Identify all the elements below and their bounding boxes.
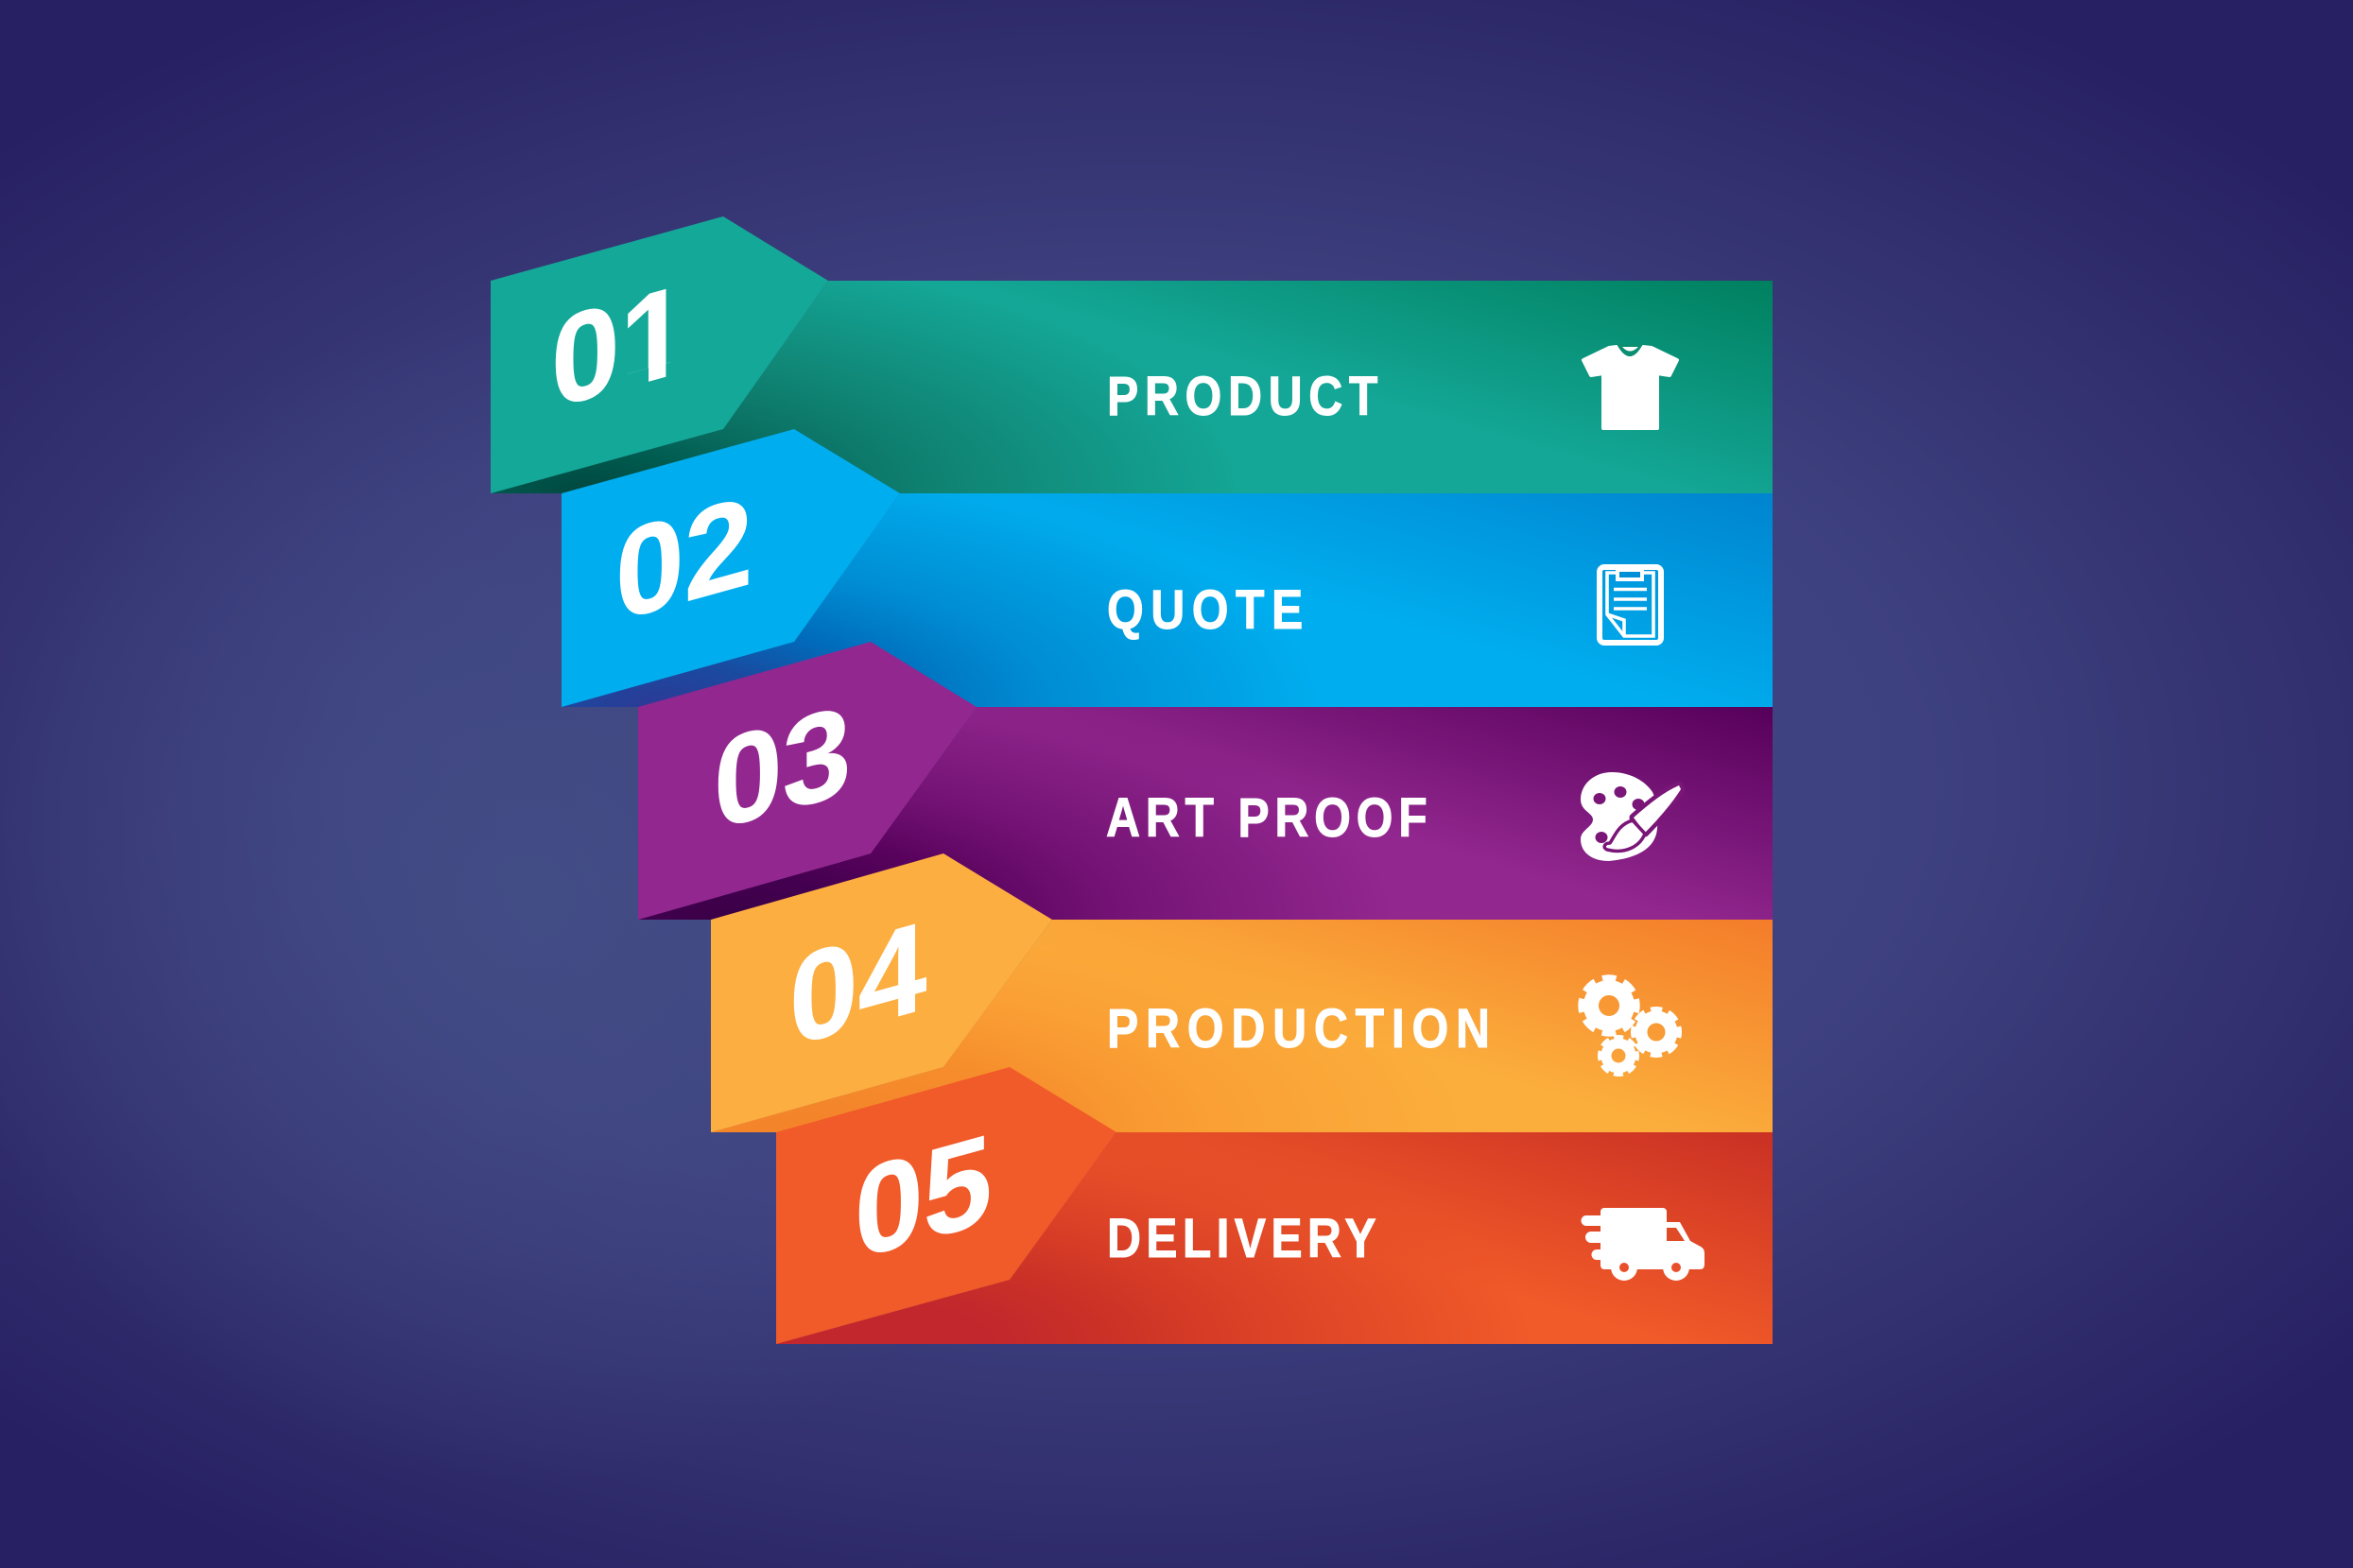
panel: step 01 product [491, 216, 1773, 493]
label: delivery: DELIVERY [1107, 1209, 1376, 1269]
icon: palette and brush [1581, 772, 1681, 861]
ribbon 02 [562, 493, 1773, 707]
label: product: PRODUCT [1107, 367, 1377, 427]
panel: step 03 art proof [638, 642, 1773, 920]
tab 03 [638, 642, 977, 920]
ribbon 03 [638, 707, 1773, 920]
label: art proof: ART PROOF [1106, 788, 1427, 849]
icon: gears [1582, 978, 1679, 1074]
panel: step 05 delivery [776, 1067, 1773, 1344]
tab 05 [776, 1067, 1116, 1344]
label: production: PRODUCTION [1107, 999, 1490, 1060]
tab 01 [491, 216, 828, 493]
tab 04 [711, 853, 1052, 1132]
ribbon 01 [491, 281, 1773, 493]
number 02: 02 [615, 468, 753, 648]
tab 02 [562, 429, 900, 707]
label: quote: QUOTE [1107, 580, 1303, 641]
ribbon 04 [711, 920, 1773, 1132]
panel: step 04 production [711, 853, 1773, 1132]
number 04: 04 [789, 893, 926, 1074]
panel: step 02 quote [562, 429, 1773, 707]
number 01: 01 [551, 255, 688, 436]
icon: clipboard [1600, 567, 1661, 643]
number 03: 03 [714, 677, 851, 857]
number 05: 05 [855, 1106, 992, 1286]
icon: delivery truck [1581, 1208, 1704, 1281]
icon: t-shirt [1583, 344, 1677, 428]
ribbon 05 [776, 1132, 1773, 1344]
